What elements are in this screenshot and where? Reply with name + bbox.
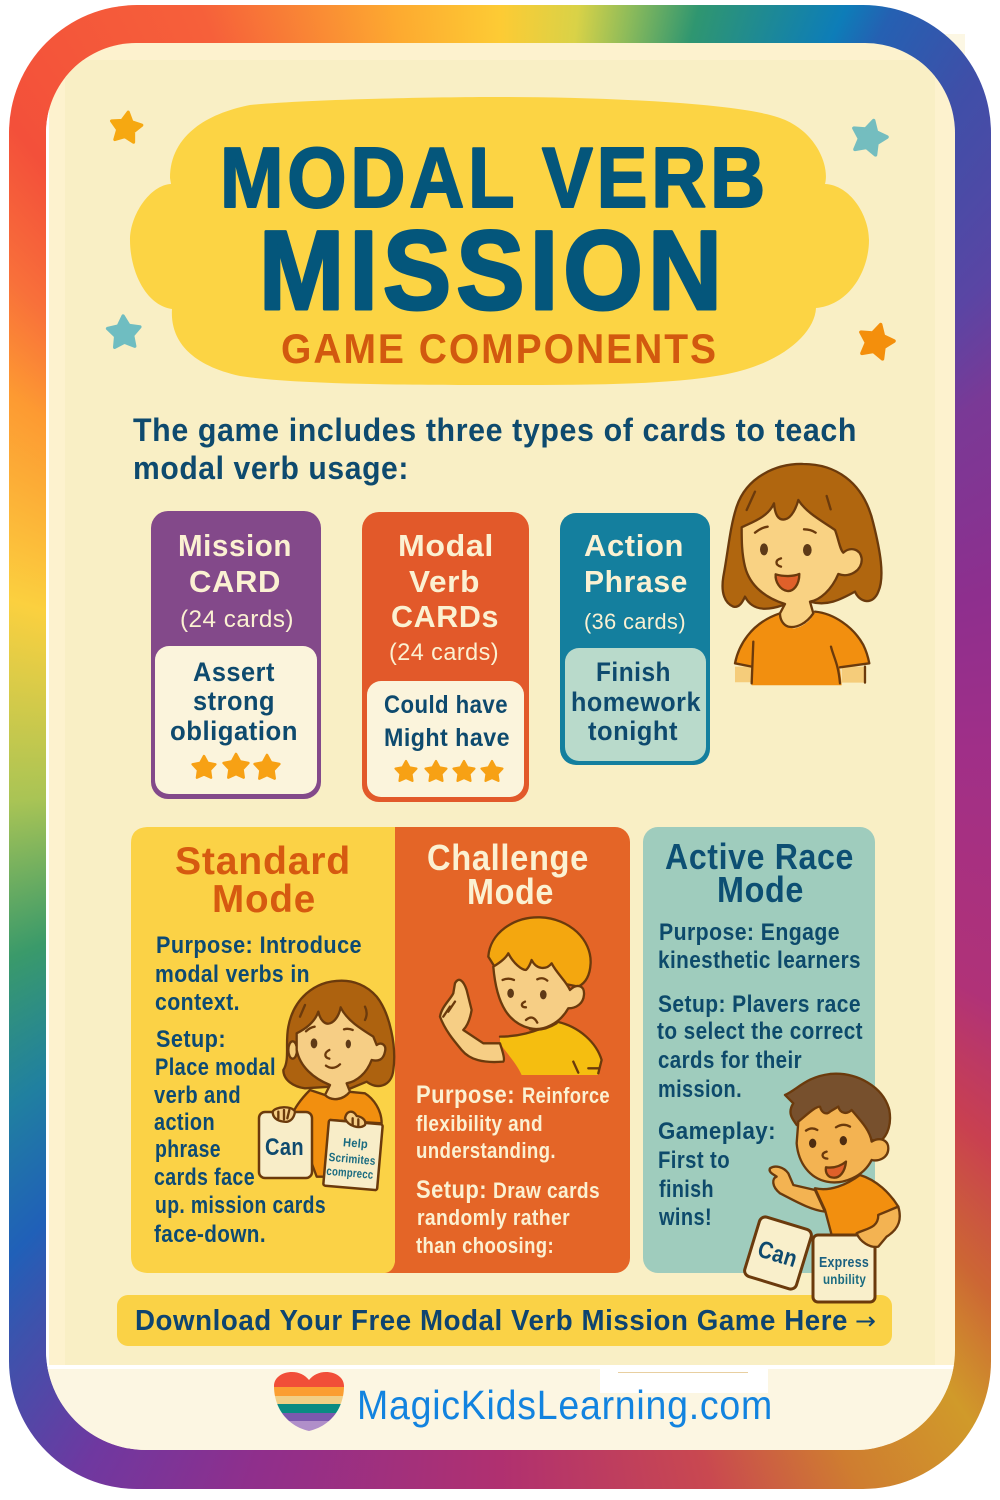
panel: challenge mode: Draw cards — [493, 1178, 600, 1203]
character: boy challenge — [440, 917, 602, 1075]
card: can tilted — [743, 1215, 813, 1291]
panel: standard mode: verb and — [154, 1082, 241, 1109]
intro text — [133, 412, 857, 486]
panel: standard mode: Purpose: Introduce — [156, 932, 362, 959]
panel: standard mode: Place modal — [155, 1054, 276, 1081]
panel: active race mode — [643, 827, 875, 1273]
star orange right — [856, 320, 897, 361]
card: action phrase: homework — [571, 687, 701, 717]
character: boy pointing — [743, 1074, 900, 1302]
card: action phrase: Phrase — [584, 564, 688, 599]
panel: standard mode: cards face — [154, 1164, 255, 1191]
card: action phrase: (36 cards) — [584, 609, 686, 634]
panel: active race mode: kinesthetic learners — [658, 947, 861, 974]
panel: standard mode: modal verbs in — [155, 961, 310, 988]
panel: standard mode: phrase — [155, 1136, 221, 1163]
panel: active race mode: Gameplay: — [658, 1118, 776, 1145]
panel: active race mode: cards for their — [658, 1047, 802, 1074]
panel: active race mode: finish — [659, 1176, 714, 1203]
panel: active race mode: Active Race — [665, 836, 854, 877]
hand on can card — [273, 1107, 295, 1122]
card: modal verb: Might have — [384, 724, 510, 752]
card: action phrase: Finish — [596, 657, 671, 687]
hand on help card — [345, 1112, 365, 1127]
panel: standard mode: Standard — [175, 840, 351, 883]
panel: challenge mode: Setup: — [416, 1176, 487, 1204]
panel: challenge mode: Reinforce — [522, 1083, 610, 1108]
panel: challenge mode: Purpose: — [416, 1081, 515, 1109]
star gold — [109, 110, 143, 143]
logo text: MagicKidsLearning.com — [357, 1382, 773, 1428]
panel: standard mode: up. mission cards — [155, 1192, 326, 1219]
panel: challenge mode: flexibility and — [416, 1111, 543, 1136]
download button — [117, 1295, 892, 1346]
panel: standard mode: Mode — [212, 878, 316, 921]
panel: standard mode: face-down. — [154, 1221, 266, 1248]
panel: challenge mode: understanding. — [416, 1138, 556, 1163]
card: help — [323, 1120, 383, 1190]
star teal right — [849, 116, 890, 157]
card: express — [813, 1235, 875, 1302]
card: can tilted: Can — [754, 1236, 801, 1273]
card: modal verb: CARDs — [391, 599, 499, 634]
card: modal verb: (24 cards) — [389, 639, 499, 666]
panel: active race mode: mission. — [658, 1076, 742, 1103]
panel: active race mode: First to — [658, 1147, 730, 1174]
card: can — [259, 1112, 312, 1178]
panel: active race mode: to select the correct — [657, 1018, 863, 1045]
subtitle: GAME COMPONENTS — [281, 325, 718, 372]
panel: challenge mode: Mode — [467, 871, 554, 912]
title line one: MODAL VERB — [220, 131, 769, 226]
panel: standard mode — [131, 827, 395, 1273]
panel: standard mode: action — [154, 1109, 215, 1136]
card: mission: Assert — [193, 657, 275, 687]
card: modal verb: Could have — [384, 691, 508, 719]
panel: challenge mode — [340, 827, 630, 1273]
panel: active race mode: Setup: Plavers race — [658, 991, 861, 1018]
card: mission: Mission — [178, 528, 292, 563]
panel: standard mode: context. — [155, 989, 240, 1016]
card: mission: (24 cards) — [180, 606, 294, 633]
download button: Download Your Free Modal Verb Mission Game Here — [135, 1305, 848, 1337]
panel: challenge mode: randomly rather — [417, 1205, 570, 1230]
panel: challenge mode: Challenge — [427, 837, 589, 878]
panel: challenge mode: than choosing: — [416, 1233, 554, 1258]
card: action phrase: Action — [584, 528, 684, 563]
logo heart — [274, 1372, 344, 1431]
panel: active race mode: Purpose: Engage — [659, 919, 840, 946]
card: help: comprecc — [326, 1164, 374, 1182]
card: modal verb: Modal — [398, 528, 494, 563]
title banner — [130, 97, 869, 385]
card: action phrase: tonight — [588, 716, 678, 746]
title line two: MISSION — [259, 208, 727, 333]
panel: standard mode: Setup: — [156, 1026, 226, 1053]
card: mission: CARD — [189, 564, 281, 599]
card: express: Express — [819, 1254, 869, 1271]
arm and hand — [857, 1207, 900, 1247]
panel: active race mode: wins! — [658, 1204, 712, 1231]
intro text: modal verb usage: — [133, 450, 409, 486]
arrow: → — [855, 1307, 876, 1335]
card: help: Scrimites — [328, 1150, 376, 1168]
panel: active race mode: Mode — [717, 869, 804, 910]
card: mission: obligation — [170, 716, 298, 746]
card: modal verb — [362, 512, 529, 802]
card: mission: strong — [193, 686, 275, 716]
card: action phrase — [560, 513, 710, 765]
character: girl with cards — [259, 981, 394, 1190]
card: mission — [151, 511, 321, 799]
decorative pale corner — [880, 34, 965, 94]
character: girl top — [723, 464, 881, 685]
intro text: The game includes three types of cards to teach — [133, 412, 857, 448]
card: can: Can — [265, 1134, 304, 1161]
card: express: unbility — [823, 1271, 866, 1287]
card: help: Help — [342, 1135, 369, 1151]
star teal left — [107, 315, 141, 348]
card: modal verb: Verb — [409, 564, 480, 599]
